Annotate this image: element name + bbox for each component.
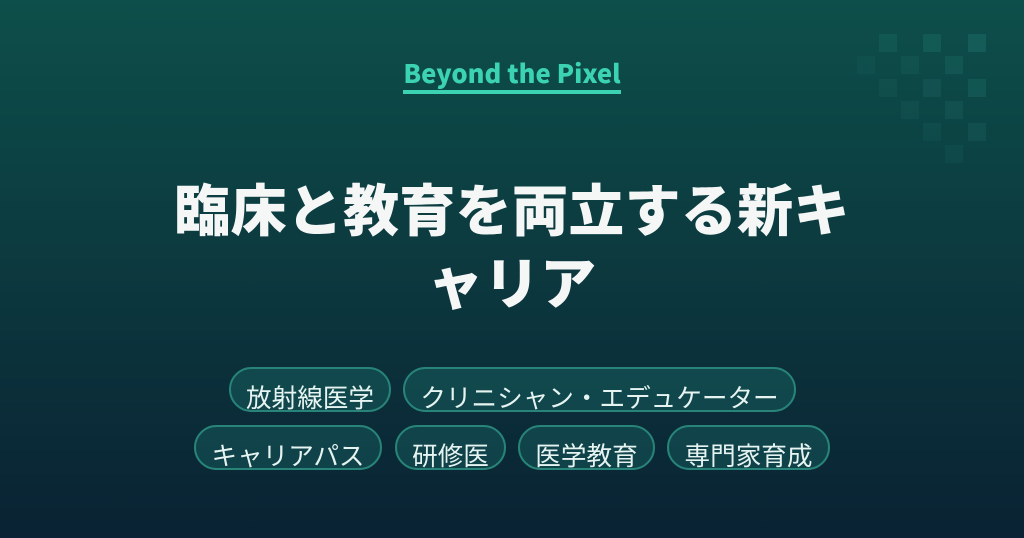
title [174, 167, 850, 321]
tag: キャリアパス [194, 425, 382, 470]
tag: 研修医 [395, 425, 506, 470]
tag: クリニシャン・エデュケーター [403, 367, 796, 412]
tag: 専門家育成 [667, 425, 830, 470]
tag: 医学教育 [518, 425, 655, 470]
decorative square pattern [879, 34, 986, 141]
brand label: Beyond the Pixel: Beyond the Pixel [403, 54, 621, 91]
tag: 放射線医学 [229, 367, 391, 412]
title: 臨床と教育を両立する新キ [174, 167, 850, 248]
title: ャリア [428, 240, 596, 321]
tags [194, 367, 830, 470]
